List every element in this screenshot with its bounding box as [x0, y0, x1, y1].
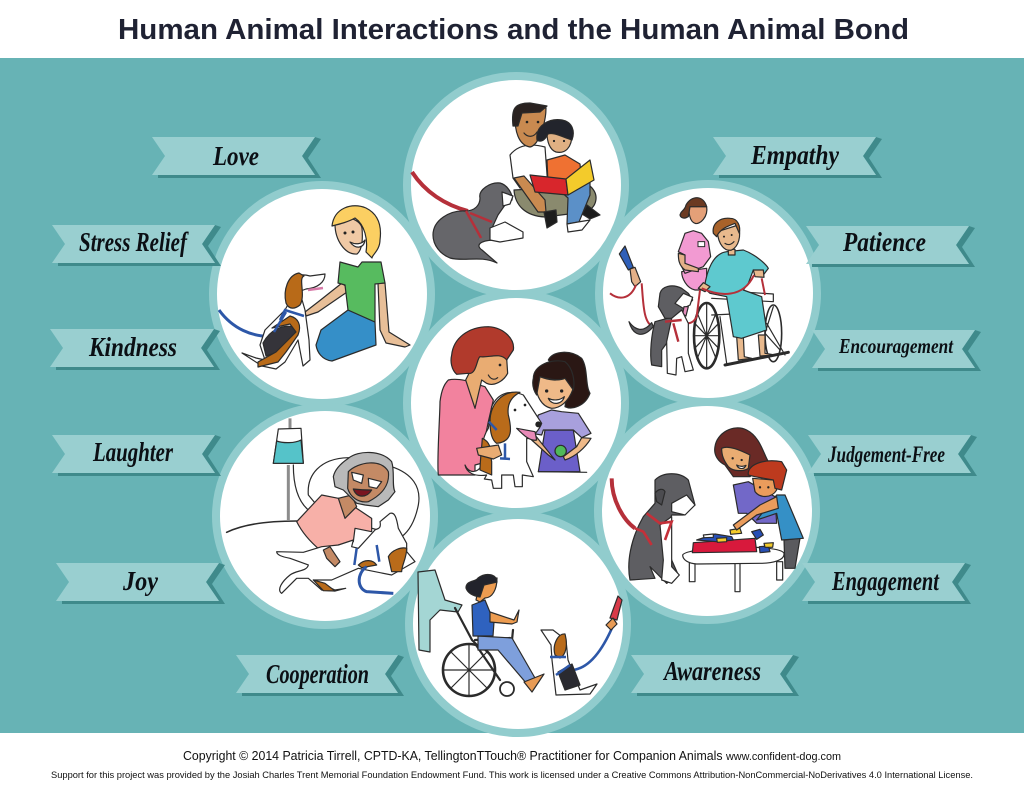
ribbon: Patience: Patience	[842, 227, 926, 257]
circle: woman in wheelchair with beagle	[409, 515, 627, 733]
circle: woman and girl with beagle	[407, 294, 625, 512]
icon: grey dog standing	[629, 286, 693, 375]
icon: woman with red hair	[438, 327, 514, 475]
circle: mother and boy playing with dog	[598, 402, 816, 620]
icon: boy hugging mother	[733, 461, 803, 568]
icon: red leash	[610, 275, 765, 327]
icon: grey dog sitting	[629, 474, 695, 583]
ribbon: Stress Relief: Stress Relief	[79, 227, 189, 257]
circle: nurse and patient in wheelchair with dog	[599, 184, 817, 402]
ribbon: Laughter	[52, 435, 221, 476]
ribbon: Empathy	[713, 137, 882, 178]
ribbon: Joy	[56, 563, 225, 604]
icon: wheelchair	[694, 290, 788, 368]
icon: woman in wheelchair	[443, 575, 544, 696]
ribbon: Love: Love	[212, 141, 259, 171]
icon: girl with dark hair	[532, 352, 591, 472]
ribbon: Encouragement: Encouragement	[838, 334, 954, 358]
icon: patient in gown	[698, 218, 768, 338]
icon: pillow and bed	[227, 458, 419, 537]
icon: beagle looking up	[541, 596, 622, 695]
ribbon: Awareness	[631, 655, 799, 696]
icon: boy with book	[530, 120, 594, 232]
icon: handler's blue sleeve and hand	[619, 246, 641, 287]
icon: grey dog lying down	[433, 183, 523, 263]
footer: copyright line: Copyright © 2014 Patricia Tirrell, CPTD-KA, TellingtonTTouch® Practitioner for Companion Animals www.confident-dog.com	[183, 749, 841, 763]
circle: man and boy reading with dog	[407, 76, 625, 294]
ribbon: Joy: Joy	[122, 566, 159, 596]
ribbon: Cooperation	[236, 655, 404, 696]
icon: nurse	[678, 198, 711, 290]
title: Human Animal Interactions and the Human Animal Bond	[118, 14, 909, 46]
ribbon: Patience	[806, 226, 975, 267]
ribbon: Engagement: Engagement	[831, 566, 940, 596]
ribbon: Engagement	[802, 563, 971, 604]
icon: table and toys	[683, 528, 784, 592]
icon: man	[510, 103, 600, 228]
icon: beagle sitting	[242, 273, 325, 369]
icon: woman with blonde hair	[305, 206, 410, 361]
circle: elderly woman in bed with dog	[216, 407, 434, 625]
icon: red leash	[412, 172, 468, 211]
ribbon: Judgement-Free	[808, 435, 977, 476]
circle: woman sitting with beagle	[213, 185, 431, 403]
ribbon: Kindness	[50, 329, 220, 370]
icon: red leash	[612, 478, 635, 528]
icon: mother	[715, 428, 777, 523]
ribbon: Empathy: Empathy	[750, 140, 840, 170]
icon: carer's arm	[418, 570, 462, 652]
ribbon: Awareness: Awareness	[662, 656, 761, 686]
icon: beagle between them	[465, 392, 542, 488]
ribbon: Laughter: Laughter	[92, 437, 173, 467]
ribbon: Encouragement	[812, 330, 981, 371]
icon: IV bag and pole	[273, 418, 308, 520]
icon: dog on lap	[277, 513, 415, 593]
footer: support and license line: Support for this project was provided by the Josiah Charles Trent Memorial Foundation Endowment Fund. This work is licensed under a Creative Commons Attribution-NonCommercial-NoDerivatives 4.0 International License.	[51, 770, 973, 781]
ribbon: Cooperation: Cooperation	[266, 659, 369, 689]
ribbon: Judgement-Free: Judgement-Free	[827, 442, 945, 467]
icon: elderly woman	[297, 452, 395, 552]
ribbon: Love	[152, 137, 321, 178]
icon: blue leash	[219, 310, 285, 336]
ribbon: Stress Relief	[52, 225, 221, 266]
ribbon: Kindness: Kindness	[88, 332, 177, 362]
